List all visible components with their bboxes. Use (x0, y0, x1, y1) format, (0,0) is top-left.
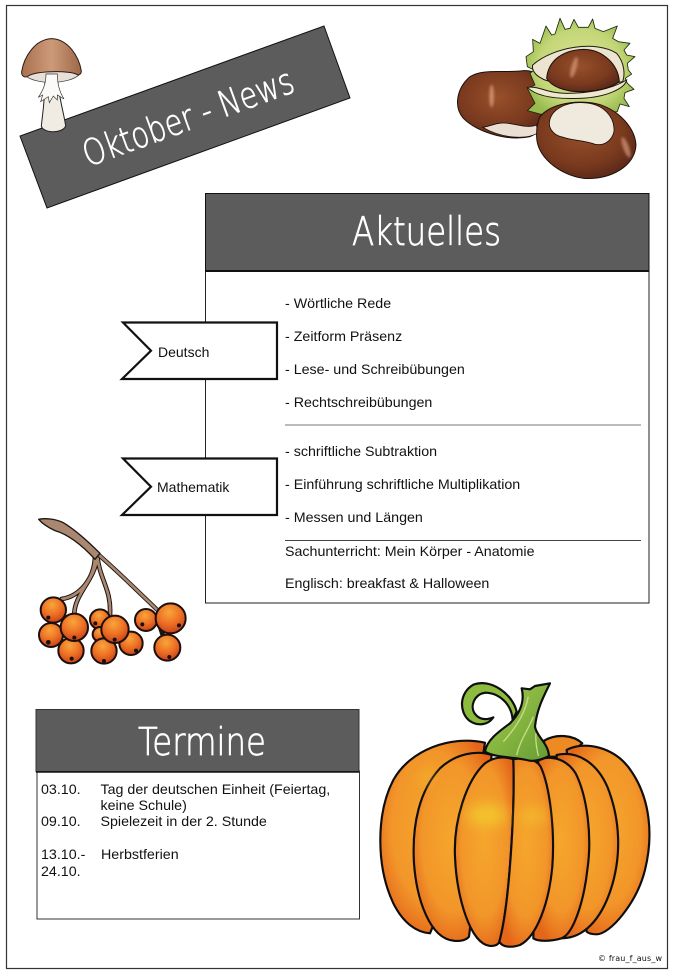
title text: Oktober - News (77, 61, 300, 175)
chestnut burr (526, 18, 635, 117)
label: Mathematik: Mathematik (157, 479, 230, 495)
Aktuelles heading: Aktuelles (352, 210, 501, 255)
dates list: Herbstferien (101, 847, 179, 863)
other subjects: Sachunterricht: Mein Körper - Anatomie (285, 544, 535, 560)
other subjects (285, 544, 535, 592)
pumpkin stem (485, 683, 550, 761)
dates list: 09.10. (41, 814, 81, 830)
list: Mathematik topics: - Einführung schriftliche Multiplikation (285, 477, 520, 493)
dates list: 24.10. (41, 864, 81, 880)
panel: Aktuelles (205, 194, 649, 603)
dates list: 03.10. (41, 782, 81, 798)
chestnut left (458, 71, 547, 138)
list: Mathematik topics: - schriftliche Subtraktion (285, 444, 437, 460)
other subjects: Englisch: breakfast & Halloween (285, 576, 489, 592)
panel: Termine (36, 710, 360, 919)
copyright note: © frau_f_aus_w (598, 954, 662, 963)
icon: pumpkin (380, 683, 649, 947)
dates list: 13.10.- (41, 847, 86, 863)
list: Deutsch topics: - Zeitform Präsenz (285, 329, 402, 345)
Termine heading: Termine (138, 720, 266, 764)
dates list: keine Schule) (100, 798, 187, 814)
dates list: Spielezeit in der 2. Stunde (100, 814, 267, 830)
pumpkin body (380, 736, 649, 947)
open husk (532, 46, 624, 84)
pumpkin stem curl (462, 683, 517, 724)
list: Deutsch topics (285, 296, 465, 411)
list: Deutsch topics: - Rechtschreibübungen (285, 395, 432, 411)
icon: mushroom (22, 39, 81, 132)
label: Mathematik (122, 458, 277, 515)
title banner (20, 26, 350, 208)
icon: chestnuts (458, 18, 636, 178)
label: Deutsch: Deutsch (158, 344, 209, 360)
Termine header (36, 710, 359, 772)
list: Deutsch topics: - Lese- und Schreibübungen (285, 362, 465, 378)
list: Deutsch topics: - Wörtliche Rede (285, 296, 391, 312)
list: Mathematik topics: - Messen und Längen (285, 510, 423, 526)
Aktuelles header (205, 194, 649, 271)
icon: rowan berries (39, 519, 186, 664)
label: Deutsch (122, 322, 277, 379)
chestnut in husk (547, 49, 619, 92)
dates list: Tag der deutschen Einheit (Feiertag, (100, 782, 330, 798)
list: Mathematik topics (285, 444, 520, 526)
dates list (41, 782, 330, 880)
chestnut front (537, 102, 636, 178)
